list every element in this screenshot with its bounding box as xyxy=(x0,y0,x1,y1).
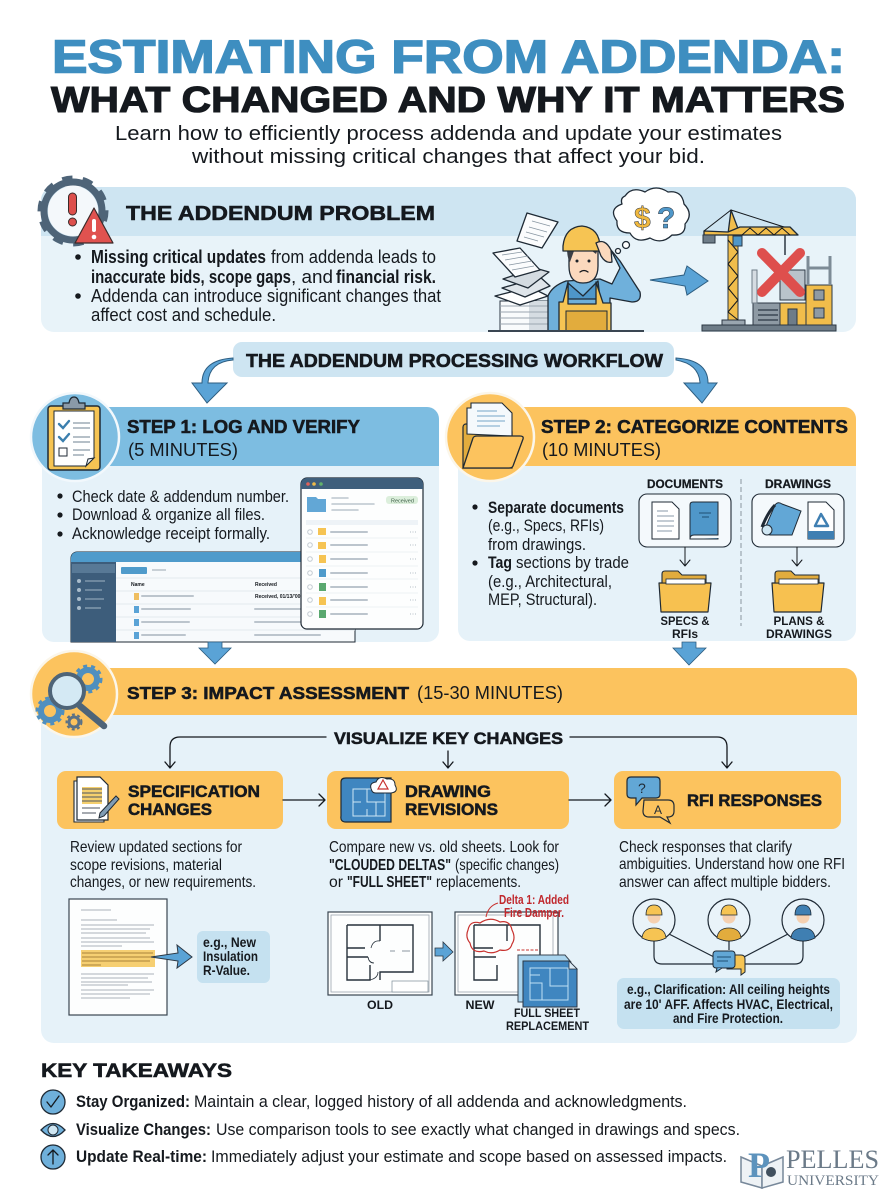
arrow xyxy=(435,942,453,961)
icon: warning gear xyxy=(41,179,113,243)
callout: delta note xyxy=(499,893,569,920)
text block: specification: Review updated sections for xyxy=(70,839,243,856)
heading: step 2 xyxy=(541,417,848,460)
text block: step 2 bullets xyxy=(472,498,629,609)
screenshot: file table window: Received xyxy=(255,582,277,588)
illustration: bidders connected to rfi response xyxy=(633,899,824,975)
icon: bidder 1 xyxy=(633,899,675,941)
callout: insulation example xyxy=(197,931,270,983)
takeaway: update real-time: Immediately adjust your estimate and scope based on assessed impacts. xyxy=(211,1147,727,1166)
sorting diagram: drawings: DRAWINGS xyxy=(765,477,831,491)
drawing: full sheet replacement: REPLACEMENT xyxy=(506,1021,589,1033)
icon: clipboard xyxy=(31,393,119,481)
subtitle: Learn how to efficiently process addenda and update your estimates xyxy=(115,123,782,145)
arrow: curved to step 2 xyxy=(676,358,717,403)
text block: step 1 bullets: Acknowledge receipt formally. xyxy=(72,524,270,543)
icon: blueprint with delta cloud xyxy=(341,778,396,822)
icon: response bubbles xyxy=(713,951,745,975)
icon: question and answer bubbles: A xyxy=(654,803,662,817)
sorting diagram: drawings: PLANS & xyxy=(774,614,825,628)
text block: rfi: ambiguities. Understand how one RFI xyxy=(619,856,845,873)
arrow xyxy=(650,266,708,295)
panel: step 3 xyxy=(31,651,857,1043)
heading: step 1: (5 MINUTES) xyxy=(128,439,238,460)
takeaway: stay organized xyxy=(41,1090,687,1114)
arrows: branching to three cards xyxy=(165,737,732,768)
sorting diagram: documents: DOCUMENTS xyxy=(647,477,723,491)
text block: problem bullets: affect cost and schedule. xyxy=(91,305,276,325)
panel: step 2 xyxy=(446,393,856,641)
takeaway: visualize changes: Use comparison tools to see exactly what changed in drawings and specs. xyxy=(216,1120,740,1139)
icon: thought bubble with dollar and question mark: ? xyxy=(657,202,675,235)
takeaway: visualize changes: Visualize Changes: xyxy=(76,1120,211,1139)
arrow: curved to step 1 xyxy=(192,358,233,403)
drawing: full sheet replacement xyxy=(506,955,589,1033)
takeaway: stay organized: Stay Organized: xyxy=(76,1092,190,1111)
callout: insulation example: R-Value. xyxy=(203,962,250,978)
text block: problem bullets: financial risk. xyxy=(336,267,436,287)
icon: specification document with pen xyxy=(74,777,119,822)
subtitle: without missing critical changes that affect your bid. xyxy=(191,146,705,168)
callout: insulation example: e.g., New xyxy=(203,934,256,950)
text block: step 2 bullets: Separate documents xyxy=(488,498,624,517)
text block: specification xyxy=(70,839,256,891)
text block: step 2 bullets: sections by trade xyxy=(516,553,629,572)
heading: visualize key changes: VISUALIZE KEY CHANGES xyxy=(334,729,563,748)
icon: question and answer bubbles xyxy=(627,777,674,823)
callout: clarification example: and Fire Protection. xyxy=(673,1010,783,1026)
logo: pelles university: P xyxy=(748,1145,770,1185)
sorting diagram: documents xyxy=(639,477,731,641)
callout: insulation example: Insulation xyxy=(203,948,258,964)
card: drawing revisions xyxy=(327,771,569,829)
text block: step 2 bullets: MEP, Structural). xyxy=(488,590,597,609)
text block: problem bullets: Addenda can introduce significant changes that xyxy=(91,286,441,306)
heading: step 3 xyxy=(127,683,563,703)
illustration: worried estimator with paper stack xyxy=(488,213,644,331)
text block: step 1 bullets xyxy=(57,487,289,543)
text block: rfi xyxy=(619,839,845,891)
title: WHAT CHANGED AND WHY IT MATTERS xyxy=(51,79,845,120)
card: specification changes: CHANGES xyxy=(128,801,212,819)
text block: drawings: "CLOUDED DELTAS" xyxy=(329,857,451,874)
text block: step 1 bullets: Check date & addendum number. xyxy=(72,487,289,506)
screenshot: folder window: Received xyxy=(391,498,414,504)
drawing: full sheet replacement: FULL SHEET xyxy=(514,1008,580,1020)
callout: clarification example: e.g., Clarification: All ceiling heights xyxy=(627,981,830,997)
icon: thought bubble with dollar and question mark: $ xyxy=(634,202,651,235)
callout: delta note: Fire Damper. xyxy=(504,906,564,920)
heading: step 1: STEP 1: LOG AND VERIFY xyxy=(127,417,360,437)
logo: pelles university xyxy=(741,1145,879,1189)
title xyxy=(51,30,845,120)
text block: step 1 bullets: Download & organize all files. xyxy=(72,505,265,524)
text block: step 2 bullets: Tag xyxy=(488,553,512,572)
text block: drawings: "FULL SHEET" xyxy=(347,874,432,891)
panel: the addendum problem xyxy=(41,179,856,332)
text block: rfi: answer can affect multiple bidders. xyxy=(619,874,831,891)
heading: step 3: STEP 3: IMPACT ASSESSMENT xyxy=(127,683,409,703)
heading: key takeaways: KEY TAKEAWAYS xyxy=(41,1061,232,1082)
logo: pelles university: UNIVERSITY xyxy=(787,1173,879,1189)
divider xyxy=(740,479,742,626)
sorting diagram: drawings: DRAWINGS xyxy=(766,627,832,641)
card: specification changes: SPECIFICATION xyxy=(128,783,260,801)
text block: problem bullets: Missing critical updates xyxy=(91,247,266,267)
heading: step 2: (10 MINUTES) xyxy=(542,439,661,460)
text block: drawings: (specific changes) xyxy=(455,857,559,874)
section heading: workflow: THE ADDENDUM PROCESSING WORKFLOW xyxy=(246,350,664,371)
text block: problem bullets xyxy=(75,247,441,325)
illustration: spec page with highlight xyxy=(69,899,167,1015)
drawing: old sheet: OLD xyxy=(367,998,393,1012)
card: drawing revisions: REVISIONS xyxy=(405,801,498,819)
text block: rfi: Check responses that clarify xyxy=(619,839,792,856)
text block: drawings: replacements. xyxy=(436,874,521,891)
drawing: new sheet with delta cloud xyxy=(455,903,558,1012)
panel: step 1 xyxy=(31,393,439,642)
text block: step 2 bullets: (e.g., Specs, RFIs) xyxy=(488,516,604,535)
text block: problem bullets: , and xyxy=(291,267,333,287)
drawing: old sheet xyxy=(328,912,432,1012)
logo: pelles university: PELLES xyxy=(786,1145,879,1174)
screenshot: file table window: Received, 01/13/'00 xyxy=(255,594,301,600)
card: drawing revisions: DRAWING xyxy=(405,783,491,801)
illustration: construction site with red cross xyxy=(702,210,836,331)
icon: magnifier and gears xyxy=(31,651,117,737)
takeaway: stay organized: Maintain a clear, logged history of all addenda and acknowledgments. xyxy=(194,1092,687,1111)
text block: drawings: or xyxy=(329,874,344,891)
text block: step 2 bullets: (e.g., Architectural, xyxy=(488,572,612,591)
card: rfi responses: RFI RESPONSES xyxy=(687,792,822,810)
screenshot: file table window xyxy=(71,552,355,642)
takeaway: update real-time xyxy=(41,1145,727,1169)
arrow: step 1 to step 3 xyxy=(199,642,231,664)
icon: bidder 2 xyxy=(708,899,750,941)
icon: question and answer bubbles: ? xyxy=(638,780,646,796)
heading: step 1 xyxy=(127,417,360,460)
text block: drawings xyxy=(329,839,560,891)
arrow xyxy=(151,945,192,968)
text block: specification: scope revisions, material xyxy=(70,857,222,874)
icon: open folder with documents xyxy=(446,393,534,481)
text block: problem bullets: from addenda leads to xyxy=(271,247,436,267)
text block: problem bullets: inaccurate bids, scope gaps xyxy=(91,267,291,287)
icon: thought bubble with dollar and question mark xyxy=(613,188,689,254)
drawing: new sheet with delta cloud: NEW xyxy=(466,998,495,1012)
title: ESTIMATING FROM ADDENDA: xyxy=(52,30,845,82)
section heading: workflow xyxy=(233,342,674,377)
card: specification changes xyxy=(57,771,283,829)
card: rfi responses xyxy=(614,771,841,829)
takeaway: update real-time: Update Real-time: xyxy=(76,1147,207,1166)
callout: clarification example xyxy=(617,978,840,1029)
heading: step 3: (15-30 MINUTES) xyxy=(417,683,563,703)
arrow: step 2 to step 3 xyxy=(673,642,706,665)
subtitle xyxy=(115,123,782,168)
text block: specification: changes, or new requirements. xyxy=(70,874,256,891)
sorting diagram: drawings xyxy=(752,477,844,641)
heading: step 2: STEP 2: CATEGORIZE CONTENTS xyxy=(541,417,848,437)
callout: delta note: Delta 1: Added xyxy=(499,893,569,907)
arrow xyxy=(283,794,325,806)
text block: step 2 bullets: from drawings. xyxy=(488,535,586,554)
screenshot: folder window xyxy=(301,478,423,629)
text block: drawings: Compare new vs. old sheets. Look for xyxy=(329,839,560,856)
callout: clarification example: are 10' AFF. Affects HVAC, Electrical, xyxy=(624,996,833,1012)
heading: THE ADDENDUM PROBLEM xyxy=(126,202,435,225)
screenshot: file table window: Name xyxy=(131,582,145,588)
sorting diagram: documents: RFIs xyxy=(672,627,698,641)
arrow xyxy=(569,794,611,806)
icon: bidder 3 xyxy=(782,899,824,941)
sorting diagram: documents: SPECS & xyxy=(660,614,710,628)
